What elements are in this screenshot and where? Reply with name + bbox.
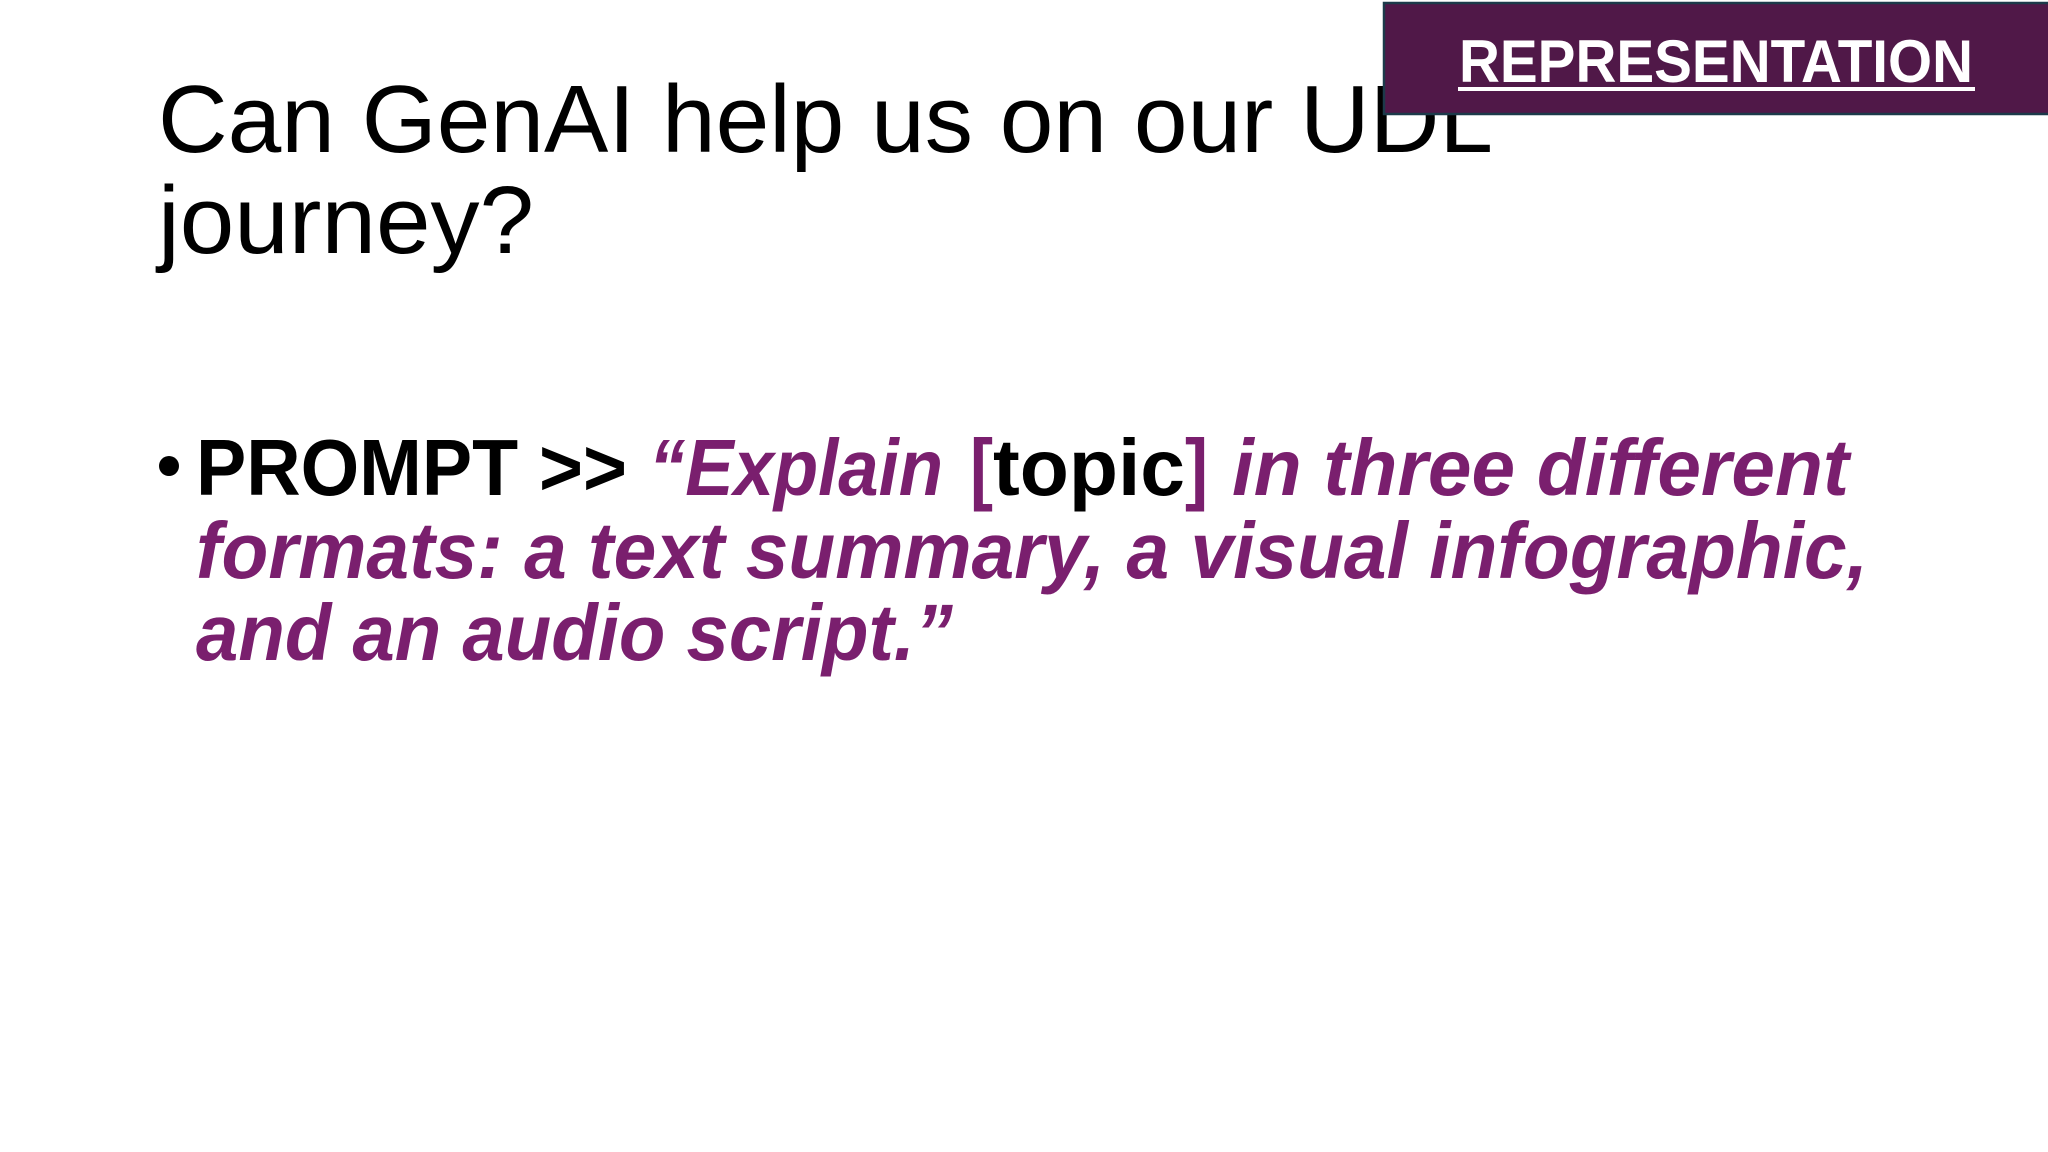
title: journey? <box>155 167 534 274</box>
bullet <box>159 456 179 476</box>
title <box>155 66 1493 274</box>
prompt label: PROMPT >> <box>196 423 627 512</box>
title: Can GenAI help us on our UDL <box>158 66 1493 173</box>
prompt text block <box>159 423 1868 677</box>
prompt quote line 3: and an audio script.” <box>196 588 953 677</box>
prompt quote line 1: “Explain <box>649 423 943 512</box>
prompt quote line 1: in three different <box>1232 423 1852 512</box>
prompt quote line 1: ] <box>1185 423 1208 512</box>
banner: representation: REPRESENTATION <box>1459 28 1973 95</box>
prompt quote line 2: formats: a text summary, a visual infographic, <box>196 506 1868 595</box>
prompt quote line 1: topic <box>993 423 1185 512</box>
prompt quote line 1: [ <box>970 423 993 512</box>
banner: representation <box>1384 3 2048 114</box>
prompt quote line 1 <box>649 423 1852 512</box>
